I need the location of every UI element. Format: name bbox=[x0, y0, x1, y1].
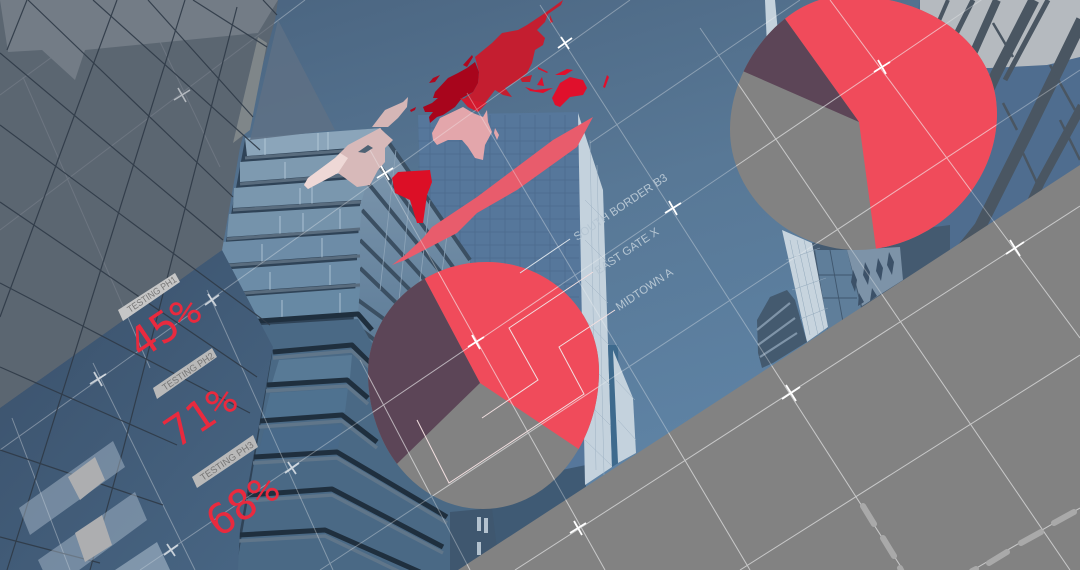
right tower lattice bbox=[845, 0, 1080, 290]
label: Midtown A: MIDTOWN A bbox=[614, 266, 676, 313]
grid lines on pies and gray band bbox=[368, 0, 1080, 570]
dark building below bottom pie bbox=[440, 465, 586, 570]
map: Europe bbox=[423, 62, 479, 123]
map: Greenland bbox=[372, 97, 408, 127]
distant building with lattice bbox=[812, 225, 950, 332]
data block row 3 bbox=[115, 542, 170, 570]
gray band bottom right bbox=[458, 165, 1080, 570]
upper left tower base bbox=[0, 0, 278, 408]
pie slice: red bbox=[424, 262, 599, 449]
red ribbon shape bbox=[392, 117, 593, 265]
pie slice: gray bbox=[368, 262, 599, 509]
round tower bbox=[757, 290, 807, 368]
value 71%: 71% bbox=[155, 374, 245, 457]
center tower upper floors bbox=[217, 128, 381, 322]
map: UK, Iceland and Scandinavia bbox=[410, 55, 473, 112]
lower left glass tower bbox=[0, 250, 273, 570]
value 45%: 45% bbox=[119, 285, 209, 368]
leader line: Midtown A bbox=[417, 310, 615, 483]
map: North America bbox=[304, 128, 393, 189]
data block row 2 bbox=[38, 492, 147, 570]
top pie slice: dark bbox=[744, 19, 859, 122]
center tower lower floors bbox=[236, 314, 480, 570]
center tower right face bbox=[345, 128, 480, 570]
top pie slice: red bbox=[785, 0, 997, 249]
testing tag 3: TESTING PH3 bbox=[199, 440, 256, 483]
dashed route marker bbox=[863, 506, 1074, 570]
white sliver below top pie bbox=[765, 0, 828, 342]
center office tower bbox=[215, 128, 480, 570]
data blocks lower left bbox=[19, 441, 170, 570]
pie chart top right bbox=[730, 0, 997, 250]
testing tag 2: TESTING PH2 bbox=[161, 351, 216, 393]
back glass tower bbox=[418, 112, 585, 490]
map: Australia and Pacific islands bbox=[520, 15, 609, 107]
map: Africa bbox=[432, 107, 499, 160]
world map bbox=[304, 0, 609, 223]
grid cross markers bbox=[90, 37, 1024, 556]
upper left tower glaze bbox=[0, 0, 335, 570]
top pie slice: gray bbox=[725, 0, 1005, 255]
label: East Gate X: EAST GATE X bbox=[593, 226, 662, 277]
pie slice: dark bbox=[368, 278, 480, 464]
map: Middle East bbox=[460, 98, 487, 112]
map: Asia bbox=[462, 0, 563, 112]
label: South Border B3: SOUTH BORDER B3 bbox=[572, 172, 670, 243]
map: South America bbox=[392, 170, 432, 223]
pie chart bottom center bbox=[368, 262, 599, 509]
leader line: East Gate X bbox=[482, 272, 593, 418]
testing tag 1: TESTING PH1 bbox=[126, 274, 179, 315]
data block row 1 bbox=[19, 441, 125, 535]
leader line: South Border B3 bbox=[520, 239, 570, 273]
small tower windows behind center tower bbox=[450, 508, 497, 570]
value 68%: 68% bbox=[197, 463, 287, 546]
white sliver towers bbox=[578, 113, 636, 485]
